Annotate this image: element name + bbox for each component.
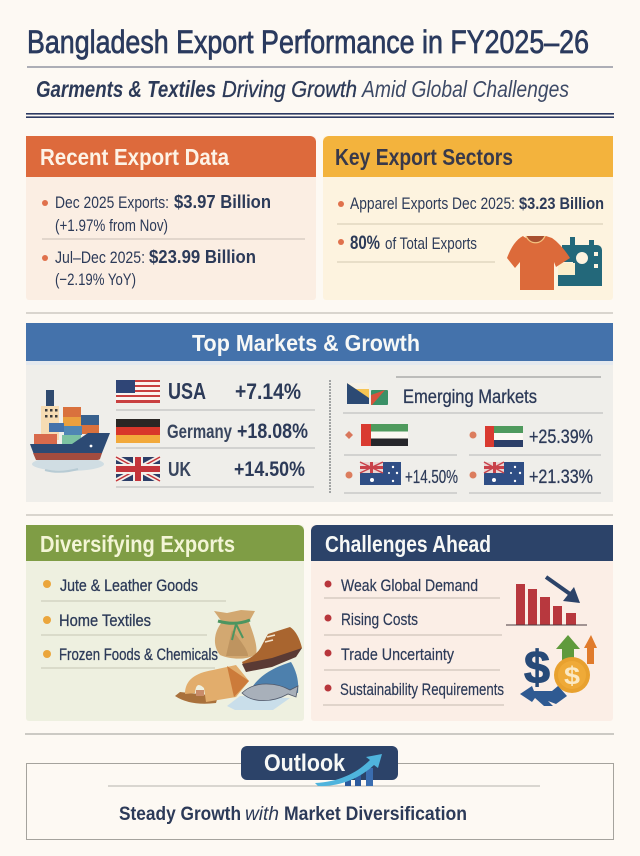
item: jute and leather: Jute & Leather Goods	[60, 576, 198, 595]
emerging market: second row right: +21.33%	[529, 467, 593, 488]
stat: December exports	[42, 192, 271, 235]
emerging market: second row right	[470, 462, 593, 488]
icon: leather shoe	[242, 627, 302, 672]
item: home textiles: Home Textiles	[59, 611, 151, 630]
icon: jute sack	[214, 610, 257, 659]
icon: rising costs: $	[564, 662, 580, 690]
emerging markets heading	[343, 377, 603, 413]
item: weak global demand: Weak Global Demand	[341, 576, 478, 595]
icon: fish on ice	[227, 662, 298, 710]
panel: top markets and growth	[26, 323, 613, 502]
flag: Australia	[360, 462, 401, 485]
row: UK: +14.50%	[234, 458, 305, 481]
emerging market: first row right: +25.39%	[529, 427, 593, 448]
outlook statement	[119, 804, 467, 825]
row: USA	[116, 378, 301, 404]
stat: share of exports	[338, 233, 477, 254]
icon: emerging market flags	[347, 383, 388, 405]
stat: December exports: $3.97 Billion	[174, 192, 271, 212]
flag: Germany	[116, 419, 160, 443]
icon: cargo ship	[30, 390, 110, 472]
header: recent export data	[26, 136, 316, 177]
badge: outlook	[241, 746, 398, 786]
emerging market: second row left: +14.50%	[405, 467, 458, 487]
header: diversifying exports	[26, 525, 304, 561]
subtitle: Amid Global Challenges	[360, 76, 569, 102]
emerging market: second row left	[346, 462, 458, 487]
row: USA: USA	[168, 378, 206, 404]
badge: outlook: Outlook	[264, 750, 346, 777]
header: top markets and growth	[26, 323, 613, 365]
icon: rising costs: $	[524, 641, 550, 693]
panel: diversifying exports	[26, 525, 304, 721]
row: Germany	[116, 419, 308, 443]
row: UK: UK	[168, 459, 191, 481]
header: recent export data: Recent Export Data	[40, 144, 229, 170]
stat: July to December exports: Jul–Dec 2025:	[55, 248, 145, 267]
outlook statement: with	[245, 804, 279, 825]
item: frozen foods and chemicals: Frozen Foods & Chemicals	[59, 645, 218, 664]
row: USA: +7.14%	[235, 379, 301, 404]
item: trade uncertainty: Trade Uncertainty	[341, 645, 454, 664]
panel: challenges ahead	[311, 525, 613, 721]
flag: USA	[116, 380, 160, 403]
stat: July to December exports: $23.99 Billion	[149, 247, 256, 267]
emerging market: first row right	[470, 426, 593, 448]
icon: woven sandal	[175, 665, 249, 704]
flag: UK	[116, 457, 160, 481]
stat: share of exports: of Total Exports	[385, 234, 477, 253]
header: key export sectors: Key Export Sectors	[335, 144, 513, 170]
subtitle: Garments & Textiles	[36, 76, 216, 102]
row: Germany: Germany	[167, 422, 232, 443]
panel: recent export data	[26, 136, 316, 300]
stat: apparel exports: Apparel Exports Dec 2025:	[350, 194, 515, 213]
header: challenges ahead	[311, 525, 613, 561]
header: key export sectors	[323, 136, 613, 177]
item: rising costs: Rising Costs	[341, 610, 418, 629]
icon: declining bar chart	[506, 577, 587, 625]
flag: UAE	[361, 424, 408, 446]
panel: key export sectors	[323, 136, 613, 300]
stat: December exports: (+1.97% from Nov)	[55, 216, 168, 235]
emerging markets heading: Emerging Markets	[403, 387, 537, 408]
flag: UAE	[485, 426, 523, 447]
outlook statement: Market Diversification	[284, 804, 467, 825]
item: rising costs	[324, 610, 418, 629]
icon: rising costs	[520, 635, 597, 706]
outlook statement: Steady Growth	[119, 804, 241, 825]
stat: share of exports: 80%	[350, 233, 380, 254]
row: UK	[116, 457, 305, 481]
icon: t-shirt	[507, 236, 570, 290]
stat: December exports: Dec 2025 Exports:	[55, 193, 169, 212]
stat: apparel exports: $3.23 Billion	[519, 194, 604, 213]
header: diversifying exports: Diversifying Exports	[40, 531, 235, 557]
icon: sewing machine	[558, 237, 602, 286]
flag: Australia	[484, 462, 524, 485]
item: sustainability requirements: Sustainability Requirements	[340, 680, 504, 699]
icon: growth arrow	[315, 754, 382, 786]
row: Germany: +18.08%	[237, 420, 308, 443]
stat: July to December exports: (−2.19% YoY)	[55, 270, 136, 289]
subtitle: Driving Growth	[222, 76, 357, 102]
header: top markets and growth: Top Markets & Growth	[192, 330, 420, 356]
emerging market: first row left	[345, 424, 408, 446]
subtitle	[26, 76, 614, 118]
stat: July to December exports	[42, 247, 256, 289]
header: challenges ahead: Challenges Ahead	[325, 531, 491, 557]
panel: outlook	[26, 746, 614, 840]
